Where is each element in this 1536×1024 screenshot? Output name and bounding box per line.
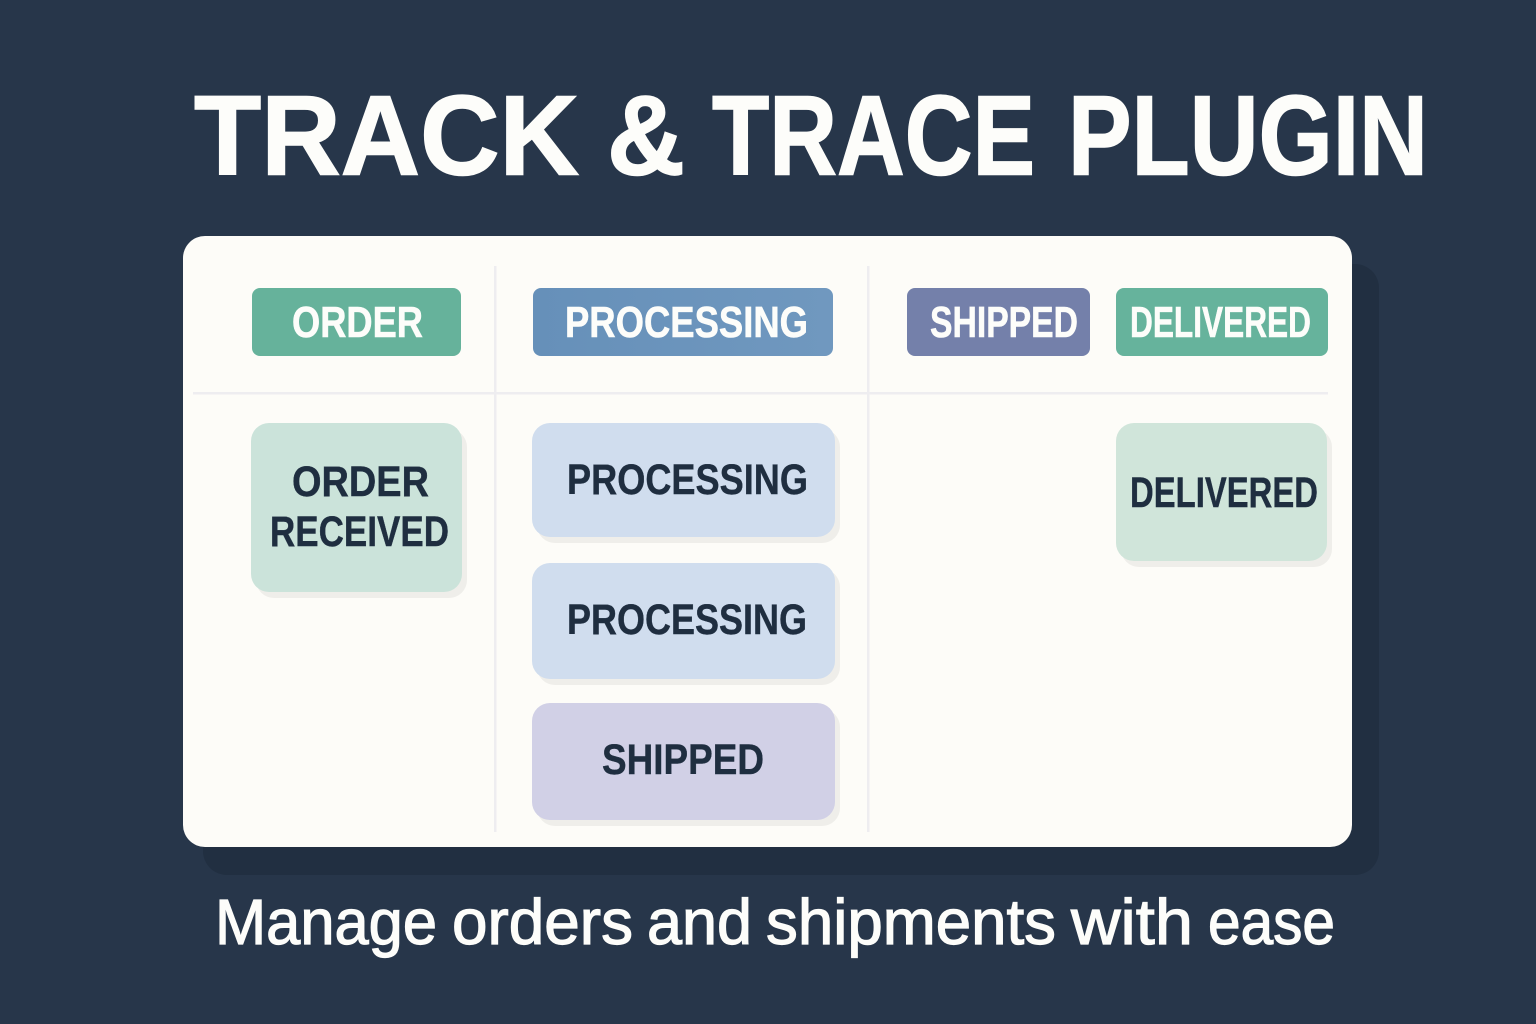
title: PLUGIN <box>1068 72 1428 198</box>
heading: order <box>252 288 461 356</box>
subtitle: and <box>647 886 752 958</box>
card: processing 1: PROCESSING <box>567 456 808 504</box>
title: & <box>607 72 685 198</box>
subtitle: orders <box>452 886 633 958</box>
card: delivered <box>1116 423 1332 567</box>
heading: order: ORDER <box>292 298 423 347</box>
card: processing 2 <box>532 563 840 685</box>
subtitle: ease <box>1208 886 1335 958</box>
title: TRACK <box>194 72 579 198</box>
panel shadow <box>203 264 1379 875</box>
subtitle: shipments <box>766 886 1056 958</box>
card: processing 2: PROCESSING <box>567 596 807 644</box>
subtitle: with <box>1070 886 1193 958</box>
title: TRACE <box>712 72 1035 198</box>
card: order received <box>251 423 467 598</box>
panel: kanban board <box>183 236 1352 847</box>
heading: processing: PROCESSING <box>565 298 808 347</box>
card: processing 1 <box>532 423 840 543</box>
title <box>194 72 1428 198</box>
card: shipped <box>532 703 840 826</box>
heading: shipped <box>907 288 1090 356</box>
heading: delivered: DELIVERED <box>1130 298 1311 347</box>
card: order received: RECEIVED <box>270 508 449 556</box>
subtitle <box>215 886 1335 958</box>
heading: delivered <box>1116 288 1328 356</box>
card: shipped: SHIPPED <box>602 736 764 784</box>
card: order received: ORDER <box>292 458 429 506</box>
subtitle: Manage <box>215 886 437 958</box>
card: delivered: DELIVERED <box>1130 469 1318 517</box>
heading: shipped: SHIPPED <box>930 298 1078 347</box>
heading: processing <box>533 288 833 356</box>
